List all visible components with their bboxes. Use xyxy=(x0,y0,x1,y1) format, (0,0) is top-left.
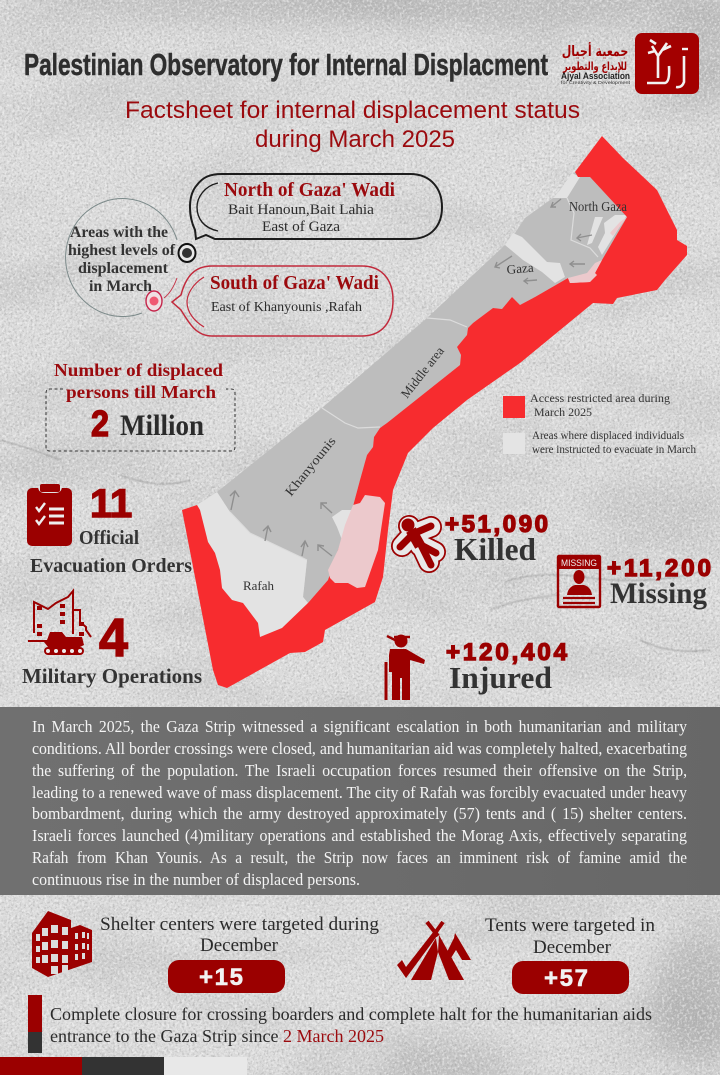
callout: areas with highest displacement: highest levels of xyxy=(68,242,176,259)
stat: missing: +11,200 xyxy=(607,555,711,582)
stat: killed xyxy=(400,511,548,567)
stat: military operations: Military Operations xyxy=(22,664,202,688)
bubble: north of Gaza Wadi: East of Gaza xyxy=(262,219,340,235)
stat: official evacuation orders: Evacuation Orders xyxy=(30,555,192,577)
icon: tank and ruined buildings xyxy=(28,591,91,655)
map: movement arrows xyxy=(230,199,592,556)
logo: Ajyal Association: للإبداع والتطوير xyxy=(562,61,627,73)
panel: displaced persons: Number of displaced xyxy=(54,360,223,380)
stat: shelter centers targeted xyxy=(32,911,380,993)
stat: military operations: 4 xyxy=(99,608,128,668)
map: pink zones xyxy=(328,217,627,588)
stat: injured xyxy=(386,634,568,700)
legend: Access restricted area during xyxy=(530,393,670,405)
map: land xyxy=(217,172,627,603)
map: region labels: Middle area xyxy=(398,343,447,401)
stat: killed: Killed xyxy=(454,531,536,567)
logo: Ajyal Association: جمعية أجيال xyxy=(562,41,628,60)
panel: summary text: continuous rise in the number of displaced persons. xyxy=(32,870,360,889)
panel: summary text xyxy=(0,707,720,895)
stat: injured: +120,404 xyxy=(446,639,568,666)
logo: Ajyal Association: for Creativity & Development xyxy=(561,80,631,85)
bubble: south of Gaza Wadi xyxy=(172,266,393,336)
panel: summary text: Rafah from Khan Younis. As a result, the Strip now faces an imminent risk of famine amid the xyxy=(32,848,687,867)
callout: areas with highest displacement: in March xyxy=(89,278,152,295)
logo: Ajyal Association xyxy=(561,33,699,94)
note: crossing closure xyxy=(28,995,652,1053)
subtitle xyxy=(125,97,580,153)
bubble: north of Gaza Wadi: North of Gaza' Wadi xyxy=(224,179,395,201)
legend xyxy=(503,393,696,456)
map of the Gaza Strip xyxy=(182,136,687,688)
panel: displaced persons: persons till March xyxy=(66,382,216,402)
stat: missing: Missing xyxy=(610,577,707,610)
icon: missing poster xyxy=(558,556,600,607)
note: crossing closure: entrance to the Gaza Strip since 2 March 2025 xyxy=(50,1026,384,1046)
stat: tents targeted: December xyxy=(533,937,612,958)
stat: official evacuation orders: Official xyxy=(79,527,139,549)
stat: injured: Injured xyxy=(449,660,552,695)
icon: body outline xyxy=(400,518,436,565)
bubble: south of Gaza Wadi: East of Khanyounis ,Rafah xyxy=(211,300,362,315)
map: region labels: Rafah xyxy=(243,579,275,593)
map: region labels: Khanyounis xyxy=(282,433,339,499)
subtitle: during March 2025 xyxy=(255,126,455,153)
panel: displaced persons: Million xyxy=(120,409,204,442)
map: region labels: Gaza xyxy=(506,260,534,277)
stat: tents targeted: +57 xyxy=(544,965,588,992)
callout: areas with highest displacement xyxy=(66,199,195,317)
stat: tents targeted xyxy=(397,915,656,994)
legend: were instructed to evacuate in March xyxy=(532,444,696,456)
subtitle: Factsheet for internal displacement status xyxy=(125,97,580,124)
stat: official evacuation orders xyxy=(27,482,192,577)
stat: killed: +51,090 xyxy=(445,511,548,538)
callout: areas with highest displacement: Areas with the xyxy=(70,224,168,241)
bubble: south of Gaza Wadi: South of Gaza' Wadi xyxy=(210,272,379,294)
stat: missing xyxy=(558,555,711,610)
panel: displaced persons: 2 xyxy=(91,403,109,444)
map: region labels xyxy=(243,199,627,593)
map: evacuation zones xyxy=(197,173,627,637)
icon: injured person xyxy=(386,634,425,700)
logo: Ajyal Association: Ajyal Association xyxy=(561,71,630,82)
icon: tents xyxy=(397,922,471,980)
map: region labels: North Gaza xyxy=(569,199,627,214)
legend: Areas where displaced individuals xyxy=(532,430,685,442)
bubble: north of Gaza Wadi: Bait Hanoun,Bait Lahia xyxy=(228,202,374,218)
map: access restricted area xyxy=(182,136,687,688)
stat: shelter centers targeted: Shelter centers were targeted during xyxy=(100,914,380,935)
bubble: north of Gaza Wadi xyxy=(190,174,442,239)
panel: displaced persons xyxy=(46,360,235,451)
stat: tents targeted: Tents were targeted in xyxy=(485,915,656,936)
icon: buildings xyxy=(32,911,92,977)
note: crossing closure: Complete closure for crossing boarders and complete halt for the humanitarian aids xyxy=(50,1004,652,1024)
panel: summary text: bombardment, during which the army destroyed approximately (57) tents and ( 15) shelter centers. xyxy=(32,804,687,823)
icon: clipboard xyxy=(27,484,72,546)
panel: summary text: leading to a renewed wave of mass displacement. The city of Rafah was forcibly evacuated under heavy xyxy=(32,783,688,802)
stat: shelter centers targeted: +15 xyxy=(199,964,243,991)
panel: summary text: conditions. All border crossings were closed, and humanitarian aid was completely halted, exacerbating xyxy=(32,739,687,758)
callout: areas with highest displacement: displacement xyxy=(78,260,169,277)
footer colour strip xyxy=(0,1057,247,1075)
panel: summary text: In March 2025, the Gaza Strip witnessed a significant escalation in both humanitarian and military xyxy=(32,717,688,736)
icon: missing poster: MISSING xyxy=(561,558,597,568)
panel: summary text: the suffering of the population. The Israeli occupation forces resumed their offensive on the Strip, xyxy=(32,761,687,780)
panel: summary text: Israeli forces launched (4)military operations and established the Morag Axis, effectively separating xyxy=(32,826,687,845)
stat: military operations xyxy=(22,591,202,688)
stat: official evacuation orders: 11 xyxy=(90,482,132,526)
stat: shelter centers targeted: December xyxy=(200,935,279,956)
map: boundaries xyxy=(230,198,598,560)
legend: March 2025 xyxy=(534,407,592,419)
